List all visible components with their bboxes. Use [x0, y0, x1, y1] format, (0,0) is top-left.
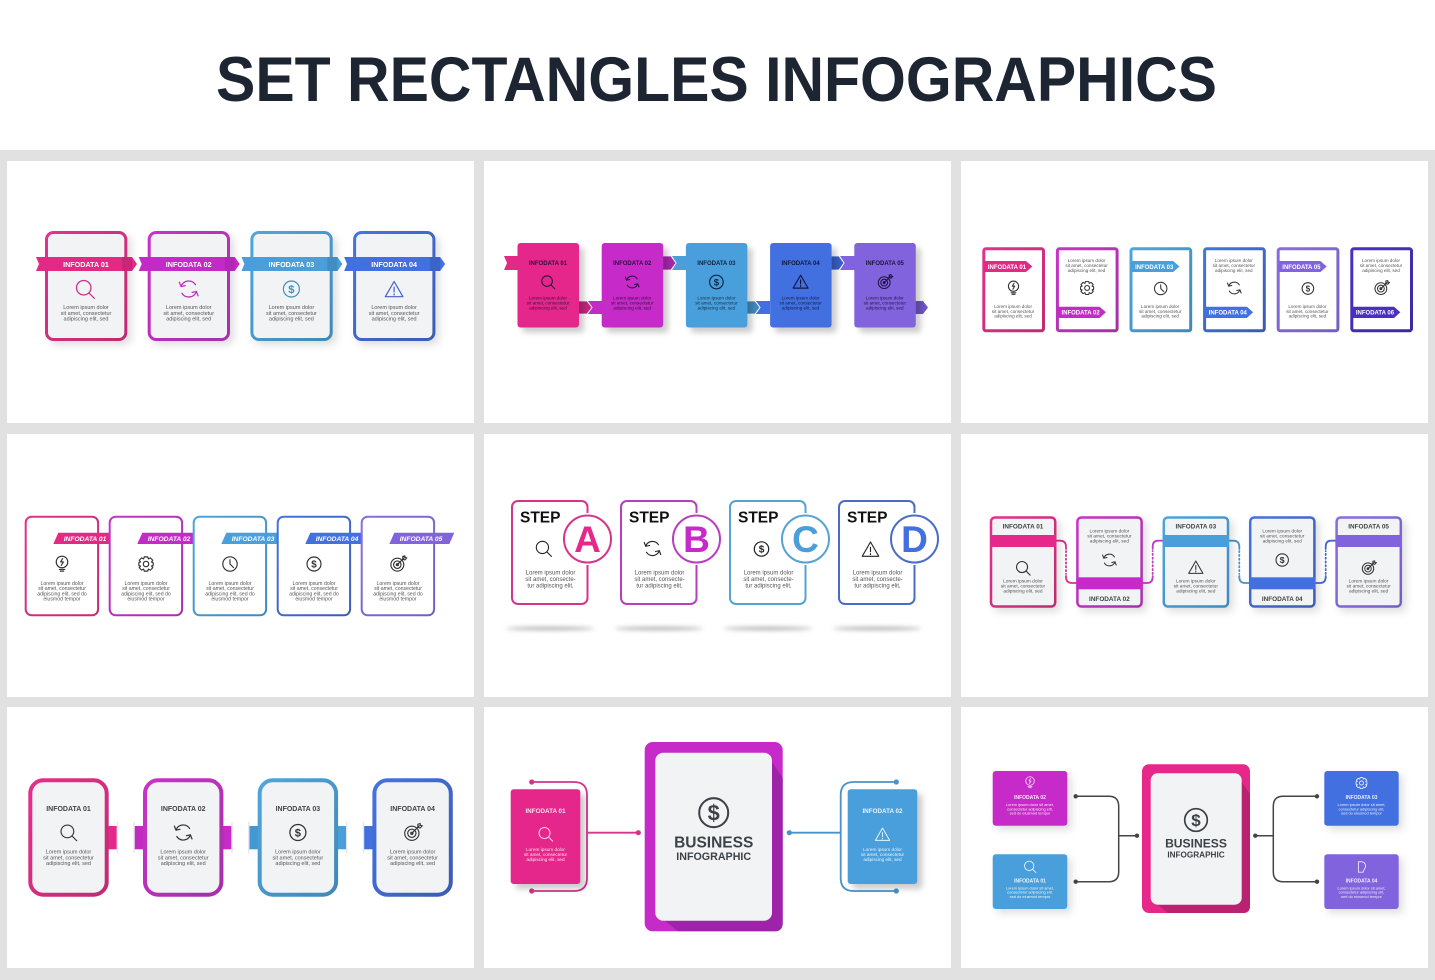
card 02: INFODATA 02: [1061, 310, 1100, 316]
card 02: Lorem ipsum dolor: [613, 296, 652, 300]
card 04: sit amet, consectetur: [779, 300, 822, 306]
card: infodata 04: INFODATA 04: [1346, 878, 1378, 884]
panel: step A to D cards: [484, 434, 951, 697]
central card: $: [1191, 811, 1201, 830]
card: infodata 01: [993, 854, 1067, 909]
card 03: INFODATA 03: [697, 261, 736, 267]
card 01: adipiscing elit, sed: [994, 314, 1032, 318]
card 01: [36, 232, 137, 340]
card 01: [990, 518, 1056, 606]
step B: STEP: [629, 510, 669, 526]
card 03: INFODATA 03: [1135, 265, 1174, 271]
card 04: sit amet, consectetur: [1213, 263, 1255, 268]
card: infodata 03: INFODATA 03: [1346, 795, 1378, 801]
card 03: Lorem ipsum dolor: [209, 581, 252, 587]
card 01: Lorem ipsum dolor: [46, 850, 91, 856]
card 04: Lorem ipsum dolor: [390, 850, 436, 856]
step A: tur adipiscing elit,: [527, 584, 574, 590]
card 04: $: [1280, 555, 1285, 565]
step D: D: [901, 519, 928, 560]
card 03: adipiscing elit, sed: [698, 306, 736, 310]
card 05: [1336, 518, 1402, 606]
central card: BUSINESS: [1165, 837, 1227, 851]
card 03: [1131, 249, 1191, 331]
card 03: eiusmod tempor: [211, 596, 249, 602]
card 02: Lorem ipsum dolor: [125, 581, 168, 587]
connector left: [529, 779, 641, 894]
connector 01 to 02: [1056, 541, 1077, 583]
card 02: Lorem ipsum dolor: [1068, 258, 1106, 263]
card 01: [26, 517, 118, 615]
step C: [724, 501, 832, 630]
card 02: sit amet, consectetur: [163, 311, 214, 317]
card 02: [602, 243, 663, 328]
card 05: adipiscing elit, sed: [1349, 588, 1389, 594]
card: infodata 01: INFODATA 01: [1014, 878, 1046, 884]
step C: tur adipiscing elit,: [745, 584, 792, 590]
card 02: [1076, 518, 1143, 606]
card 02: [110, 517, 202, 615]
step C: C: [792, 519, 819, 560]
card 05: sit amet, consectetur: [1346, 584, 1391, 590]
card 03: Lorem ipsum dolor: [269, 305, 314, 311]
title: SET RECTANGLES INFOGRAPHICS: [216, 45, 1217, 115]
card 05: sit amet, consectetur: [374, 586, 422, 592]
tabs 03 to 04: [337, 822, 373, 853]
card 01: adipiscing elit, sed: [46, 861, 91, 867]
card 04: [1249, 518, 1315, 606]
card 03: adipiscing elit, sed: [1141, 314, 1179, 318]
card 01: Lorem ipsum dolor: [1003, 578, 1043, 584]
connector 02 to 03: [1143, 541, 1163, 583]
card 04: INFODATA 04: [371, 260, 417, 269]
card 02: INFODATA 02: [613, 261, 652, 267]
card 03: sit amet, consectetur: [1139, 309, 1182, 314]
card: infodata 02: consectetur adipiscing elit,: [1007, 806, 1053, 811]
card 04: INFODATA 04: [781, 261, 820, 267]
card 02: sit amet, consectetur: [611, 300, 654, 306]
card 02: [1057, 249, 1117, 331]
card 02: adipiscing elit, sed: [1068, 268, 1106, 273]
panel: six outlined cards with tags: [961, 161, 1428, 423]
central card: BUSINESS: [674, 834, 753, 852]
card 04: [770, 243, 832, 328]
card 05: sit amet, consectetur: [864, 300, 906, 306]
card 05: adipiscing elit, sed do: [373, 592, 423, 598]
connector right: [1253, 794, 1319, 884]
card: infodata 03: Lorem ipsum dolor sit amet,: [1337, 802, 1386, 807]
card 05: INFODATA 05: [1282, 265, 1321, 271]
card 02: sit amet, consectetur: [1065, 263, 1108, 268]
card 06: sit amet, consectetur: [1360, 263, 1403, 268]
central card: [645, 742, 783, 931]
card 01: [518, 243, 579, 328]
card 01: eiusmod tempor: [43, 596, 81, 602]
card 03: [260, 780, 336, 895]
link ribbon 03 to 04: [746, 301, 770, 314]
link ribbon 02 to 03: [662, 256, 686, 270]
card 03: [1163, 518, 1229, 606]
step B: tur adipiscing elit,: [636, 584, 683, 590]
card: infodata 02: sit amet, consectetur: [861, 852, 905, 857]
card 01: INFODATA 01: [529, 261, 568, 267]
card 04: INFODATA 04: [316, 536, 359, 543]
ribbon tail: start: [504, 256, 518, 270]
card 04: Lorem ipsum dolor: [782, 296, 820, 300]
link ribbon 01 to 02: [578, 301, 602, 314]
card 04: adipiscing elit, sed: [372, 316, 417, 322]
step A: sit amet, consecte-: [525, 577, 576, 583]
card: infodata 04: Lorem ipsum dolor sit amet,: [1337, 885, 1386, 890]
card 03: [194, 517, 286, 615]
card: infodata 01: [511, 789, 580, 884]
step B: B: [683, 519, 710, 560]
card 02: adipiscing elit, sed: [1090, 538, 1129, 544]
card 05: [854, 243, 916, 328]
card 03: sit amet, consectetur: [695, 300, 738, 306]
card 06: Lorem ipsum dolor: [1362, 258, 1400, 263]
card 04: sit amet, consectetur: [387, 856, 438, 862]
step D: [833, 501, 940, 630]
card: infodata 02: [848, 789, 917, 884]
card 01: sit amet, consectetur: [38, 586, 86, 592]
card 01: sit amet, consectetur: [1001, 584, 1046, 590]
step A: A: [574, 519, 601, 560]
card 05: Lorem ipsum dolor: [377, 581, 420, 587]
central card: INFOGRAPHIC: [1167, 850, 1225, 859]
panel: five outlined cards with slanted tags: [7, 434, 474, 697]
card 03: INFODATA 03: [276, 806, 320, 813]
card 03: adipiscing elit, sed: [1176, 588, 1216, 594]
card 02: [139, 232, 240, 340]
step C: $: [759, 545, 765, 556]
card 01: Lorem ipsum dolor: [529, 296, 567, 300]
card 02: adipiscing elit, sed: [613, 306, 651, 310]
card 05: [1278, 249, 1338, 331]
card 02: adipiscing elit, sed: [166, 316, 211, 322]
card: infodata 03: sed do eiusmod tempor: [1341, 811, 1383, 816]
card: infodata 02: INFODATA 02: [862, 808, 903, 815]
card: infodata 04: sed do eiusmod tempor: [1341, 894, 1383, 899]
card: infodata 03: [1324, 771, 1399, 826]
card: infodata 01: consectetur adipiscing elit,: [1007, 890, 1053, 895]
card 03: adipiscing elit, sed do: [205, 592, 255, 598]
card 01: INFODATA 01: [64, 536, 107, 543]
card 02: INFODATA 02: [148, 536, 191, 543]
central card: [1142, 764, 1250, 913]
card 01: Lorem ipsum dolor: [41, 581, 84, 587]
card 04: INFODATA 04: [1209, 310, 1248, 316]
card 03: Lorem ipsum dolor: [1176, 578, 1216, 584]
card 06: adipiscing elit, sed: [1362, 268, 1400, 273]
card 05: Lorem ipsum dolor: [866, 296, 904, 300]
card 05: sit amet, consectetur: [1286, 309, 1329, 314]
card 02: Lorem ipsum dolor: [160, 850, 206, 856]
tabs 02 to 03: [223, 822, 259, 853]
card: infodata 02: Lorem ipsum dolor: [863, 847, 902, 852]
card 01: adipiscing elit, sed do: [37, 592, 87, 598]
card 04: Lorem ipsum dolor: [371, 305, 417, 311]
card 03: $: [295, 827, 302, 840]
card 04: Lorem ipsum dolor: [1215, 258, 1253, 263]
card 01: sit amet, consectetur: [527, 300, 570, 306]
card 02: sit amet, consectetur: [122, 586, 170, 592]
connector 04 to 05: [1316, 541, 1336, 583]
card 01: sit amet, consectetur: [992, 309, 1035, 314]
card 04: sit amet, consectetur: [369, 311, 420, 317]
step D: sit amet, consecte-: [852, 577, 903, 583]
central card: $: [708, 801, 720, 826]
card 05: adipiscing elit, sed: [866, 306, 904, 310]
card 04: adipiscing elit, sed do: [289, 592, 339, 598]
card 02: eiusmod tempor: [127, 596, 165, 602]
card: infodata 03: consectetur adipiscing elit,: [1339, 806, 1384, 811]
card 01: [984, 249, 1044, 331]
panel: five banded cards with dotted connectors: [961, 434, 1428, 697]
card 03: adipiscing elit, sed: [275, 861, 320, 867]
step A: [506, 501, 614, 630]
card 03: Lorem ipsum dolor: [697, 296, 736, 300]
card 04: INFODATA 04: [1262, 596, 1303, 603]
card 01: INFODATA 01: [988, 265, 1027, 271]
card 04: [344, 232, 445, 340]
card 04: eiusmod tempor: [295, 596, 333, 602]
card 02: INFODATA 02: [166, 260, 212, 269]
card: infodata 04: [1324, 854, 1399, 909]
step B: Lorem ipsum dolor: [635, 570, 684, 576]
step D: tur adipiscing elit,: [854, 584, 901, 590]
card 04: adipiscing elit, sed: [782, 306, 820, 310]
card: infodata 01: Lorem ipsum dolor sit amet,: [1006, 885, 1054, 890]
card 05: INFODATA 05: [866, 261, 905, 267]
central card: INFOGRAPHIC: [676, 851, 751, 863]
card 04: [1205, 249, 1264, 331]
card 02: [145, 780, 221, 895]
header band: [0, 0, 1435, 150]
card 02: sit amet, consectetur: [158, 856, 209, 862]
card 03: [241, 232, 342, 340]
panel: five solid cards with chevron links: [484, 161, 951, 423]
card 01: Lorem ipsum dolor: [994, 304, 1032, 309]
card 03: Lorem ipsum dolor: [1141, 304, 1180, 309]
card: infodata 01: sit amet, consectetur: [524, 852, 568, 857]
card 03: $: [288, 284, 295, 296]
card 04: adipiscing elit, sed: [1263, 538, 1302, 544]
card 06: INFODATA 06: [1356, 310, 1395, 316]
card: infodata 01: Lorem ipsum dolor: [526, 847, 565, 852]
card 04: [374, 780, 451, 895]
card: infodata 02: Lorem ipsum dolor sit amet,: [1006, 802, 1054, 807]
card 01: adipiscing elit, sed: [1003, 588, 1043, 594]
card 05: eiusmod tempor: [379, 596, 417, 602]
card 03: [686, 243, 747, 328]
card: infodata 02: [993, 771, 1067, 826]
step C: STEP: [738, 510, 778, 526]
card 04: adipiscing elit, sed: [1215, 268, 1253, 273]
card 02: INFODATA 02: [1089, 596, 1130, 603]
card: infodata 02: INFODATA 02: [1014, 795, 1046, 801]
step D: Lorem ipsum dolor: [853, 570, 902, 576]
card 02: adipiscing elit, sed do: [121, 592, 171, 598]
card 01: INFODATA 01: [46, 806, 91, 813]
card 04: $: [311, 559, 317, 570]
card 03: INFODATA 03: [269, 260, 314, 269]
card 04: sit amet, consectetur: [1260, 534, 1305, 540]
card 01: INFODATA 01: [63, 260, 109, 269]
card 05: INFODATA 05: [1348, 524, 1389, 530]
card 03: INFODATA 03: [1175, 524, 1217, 530]
link ribbon 04 to 05: [831, 256, 855, 270]
card 03: INFODATA 03: [232, 536, 275, 543]
step C: sit amet, consecte-: [743, 577, 794, 583]
card 04: Lorem ipsum dolor: [293, 581, 336, 587]
end arrow: [915, 301, 928, 314]
card 03: sit amet, consectetur: [266, 311, 317, 317]
card: infodata 01: sed do eiusmod tempor: [1010, 894, 1051, 899]
card: infodata 01: INFODATA 01: [525, 808, 566, 815]
tabs 01 to 02: [108, 822, 144, 853]
connector left: [1074, 794, 1139, 884]
card 04: [278, 517, 370, 615]
card 01: adipiscing elit, sed: [529, 306, 567, 310]
card 05: Lorem ipsum dolor: [1349, 578, 1389, 584]
card: infodata 02: adipiscing elit, sed: [863, 857, 902, 862]
card 01: sit amet, consectetur: [43, 856, 94, 862]
step B: sit amet, consecte-: [634, 577, 685, 583]
step C: Lorem ipsum dolor: [744, 570, 793, 576]
card 01: adipiscing elit, sed: [64, 316, 108, 322]
step A: Lorem ipsum dolor: [526, 570, 575, 576]
card 03: $: [714, 277, 720, 288]
card 01: sit amet, consectetur: [61, 311, 112, 317]
card 03: sit amet, consectetur: [1174, 584, 1218, 590]
card 05: [362, 517, 454, 615]
step B: [615, 501, 722, 630]
card 04: Lorem ipsum dolor: [1262, 528, 1302, 534]
card 03: Lorem ipsum dolor: [275, 850, 321, 856]
connector right: [787, 779, 899, 894]
card: infodata 01: adipiscing elit, sed: [526, 857, 565, 862]
panel: four cards with arrow ribbons: [7, 161, 474, 423]
card 02: adipiscing elit, sed: [161, 861, 206, 867]
step A: STEP: [520, 510, 560, 526]
card 01: [30, 780, 107, 895]
panel: central business card with four side cards: [961, 707, 1428, 968]
card 05: Lorem ipsum dolor: [1288, 304, 1327, 309]
card 04: INFODATA 04: [390, 806, 435, 813]
card 02: INFODATA 02: [161, 806, 206, 813]
card: infodata 04: consectetur adipiscing elit,: [1339, 890, 1384, 895]
card 02: sit amet, consectetur: [1087, 534, 1132, 540]
card 06: [1352, 249, 1412, 331]
connector 03 to 04: [1229, 541, 1250, 583]
card 04: adipiscing elit, sed: [390, 861, 435, 867]
card 02: Lorem ipsum dolor: [166, 305, 212, 311]
card 04: sit amet, consectetur: [290, 586, 338, 592]
card 05: adipiscing elit, sed: [1289, 314, 1327, 318]
panel: central business card with two side cards: [484, 707, 951, 968]
card 05: INFODATA 05: [400, 536, 443, 543]
card 01: INFODATA 01: [1003, 524, 1044, 530]
card 02: Lorem ipsum dolor: [1090, 528, 1130, 534]
card: infodata 02: sed do eiusmod tempor: [1010, 811, 1051, 816]
card 03: sit amet, consectetur: [206, 586, 254, 592]
card 03: adipiscing elit, sed: [269, 316, 314, 322]
card 03: sit amet, consectetur: [273, 856, 323, 862]
step D: STEP: [847, 510, 887, 526]
card 01: Lorem ipsum dolor: [63, 305, 109, 311]
card 05: $: [1306, 284, 1311, 293]
panel: four rounded cards with side tabs: [7, 707, 474, 968]
